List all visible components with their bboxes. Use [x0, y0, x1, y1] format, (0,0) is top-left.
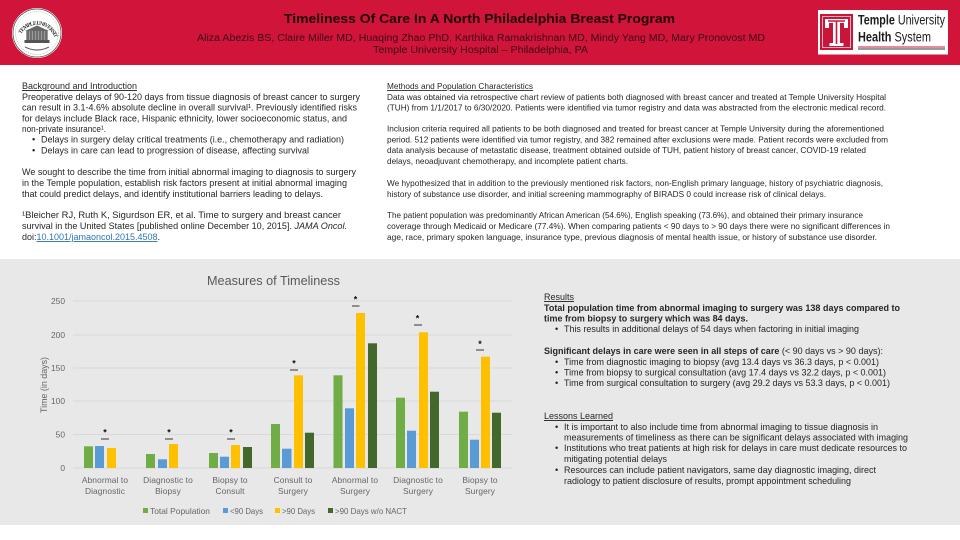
y axis labels: 150 — [51, 363, 65, 373]
x axis category labels: Abnormal to — [332, 475, 378, 485]
bars: Biopsy to Surgery — [459, 357, 501, 468]
x axis category labels — [82, 475, 498, 496]
text block: background and introduction: survival in the United States [published online December 10, 2015]. JAMA Oncol. — [22, 221, 347, 231]
bars: Consult to Surgery — [271, 375, 314, 468]
panel: lower gray section — [0, 259, 960, 525]
text block: results: Time from biopsy to surgical consultation (avg 17.4 days vs 32.2 days, p < 0.001) — [564, 368, 886, 378]
text block: lessons learned: radiology to patient disclosure of results, prompt appointment scheduling — [564, 476, 851, 486]
bars: Biopsy to Consult — [209, 445, 252, 468]
text block: background and introduction: for delays include Black race, Hispanic ethnicity, lower socioeconomic status, and — [22, 113, 347, 123]
text block: background and introduction: in the Temple population, establish risk factors present at initial abnormal imaging — [22, 178, 347, 188]
significance markers: * — [292, 358, 296, 368]
x axis category labels: Biopsy to — [462, 475, 498, 485]
icon: Temple University Health System logo: Health System — [858, 30, 931, 44]
text block: methods and population characteristics: coverage through Medicaid or Medicare (77.4%). When comparing patients < 90 days to > 90 days there were no significant differences in — [387, 221, 890, 231]
x axis category labels: Surgery — [403, 486, 434, 496]
text block: methods and population characteristics: Methods and Population Characteristics — [387, 81, 533, 91]
text block: lessons learned — [544, 411, 908, 486]
y axis title: Time (in days) — [39, 357, 49, 413]
text block: methods and population characteristics: The patient population was predominantly African American (54.6%), English speaking (73.6%), and obtained their primary insurance — [387, 210, 863, 220]
bars: Diagnostic to Surgery — [396, 332, 439, 468]
x axis category labels: Surgery — [278, 486, 309, 496]
text block: background and introduction: non-private insurance¹. — [22, 124, 106, 134]
chart legend: >90 Days w/o NACT — [335, 506, 407, 516]
text block: methods and population characteristics: delays, neoadjuvant chemotherapy, and incomplete patient charts. — [387, 156, 628, 166]
significance markers: * — [478, 339, 482, 349]
text block: background and introduction: Delays in care can lead to progression of disease, affecting survival — [41, 145, 309, 155]
panel: header banner — [0, 0, 960, 65]
authors: Aliza Abezis BS, Claire Miller MD, Huaqing Zhao PhD, Karthika Ramakrishnan MD, Mindy Yang MD, Mary Pronovost MD — [197, 33, 765, 44]
text block: lessons learned: • — [555, 443, 558, 453]
y axis labels: 100 — [51, 396, 65, 406]
text block: results: Results — [544, 292, 574, 302]
x axis category labels: Diagnostic to — [393, 475, 443, 485]
y axis labels: 250 — [51, 296, 65, 306]
text block: background and introduction: Delays in surgery delay critical treatments (i.e., chemotherapy and radiation) — [41, 135, 344, 145]
x axis category labels: Diagnostic — [85, 486, 125, 496]
text block: methods and population characteristics: Inclusion criteria required all patients to be both diagnosed and treated for breast cancer at Temple University during the aforementioned — [387, 124, 884, 134]
y axis labels: 200 — [51, 330, 65, 340]
text block: results: Time from diagnostic imaging to biopsy (avg 13.4 days vs 36.3 days, p < 0.001) — [564, 357, 879, 367]
text block: results: • — [555, 324, 558, 334]
x axis category labels: Surgery — [340, 486, 371, 496]
text block: lessons learned: Lessons Learned — [544, 411, 613, 421]
text block: background and introduction: Background and Introduction — [22, 81, 137, 91]
text block: methods and population characteristics: age, race, primary spoken language, insurance type, previous diagnosis of mental health issue, or history of substance use disorder. — [387, 232, 877, 242]
significance markers: * — [103, 428, 107, 438]
y axis labels — [51, 296, 65, 473]
text block: background and introduction: • — [32, 145, 35, 155]
text block: background and introduction: • — [32, 135, 35, 145]
y axis labels: 0 — [60, 463, 65, 473]
text block: results: This results in additional delays of 54 days when factoring in initial imaging — [564, 324, 859, 334]
text block: lessons learned: • — [555, 422, 558, 432]
text block: methods and population characteristics: (TUH) from 1/1/2017 to 6/30/2020. Patients were identified via tumor registry and data was abstracted from the electronic medical record. — [387, 103, 886, 113]
bars: Abnormal to Surgery — [334, 313, 377, 468]
chart legend: >90 Days — [282, 506, 315, 516]
text block: lessons learned: It is important to also include time from abnormal imaging to tissue diagnosis in — [564, 422, 878, 432]
x axis category labels: Surgery — [465, 486, 496, 496]
chart legend — [143, 506, 407, 516]
icon: Temple University Health System logo: Temple University — [858, 12, 945, 28]
text block: methods and population characteristics: data analysis because of metastatic disease, treatment obtained outside of TUH, patient history of breast cancer, COVID-19 related — [387, 145, 866, 155]
chart legend: <90 Days — [230, 506, 263, 516]
x axis category labels: Diagnostic to — [143, 475, 193, 485]
x axis category labels: Consult — [215, 486, 245, 496]
text block: background and introduction: doi:10.1001/jamaoncol.2015.4508. — [22, 232, 160, 242]
affiliation: Temple University Hospital – Philadelphia, PA — [373, 45, 588, 56]
icon: Temple University Health System logo — [818, 10, 948, 54]
text block: lessons learned: mitigating potential delays — [564, 454, 667, 464]
chart: Measures of Timeliness bar chart — [39, 273, 512, 516]
text block: results: Time from surgical consultation to surgery (avg 29.2 days vs 53.3 days, p < 0.001) — [564, 378, 890, 388]
text block: lessons learned: Institutions who treat patients at high risk for delays in care must dedicate resources to — [564, 443, 907, 453]
significance markers: * — [416, 314, 420, 324]
text block: results — [544, 292, 900, 388]
text block: methods and population characteristics: history of substance use disorder, and initial screening mammography of BIRADS 0 could increase risk of clinical delays. — [387, 189, 826, 199]
text block: background and introduction — [22, 81, 360, 242]
text block: results: Total population time from abnormal imaging to surgery was 138 days compared to — [544, 303, 900, 313]
chart legend: Total Population — [150, 506, 210, 516]
text block: lessons learned: measurements of timeliness as there can be significant delays associated with imaging — [564, 432, 908, 442]
x axis category labels: Biopsy to — [212, 475, 248, 485]
text block: background and introduction: ¹Bleicher RJ, Ruth K, Sigurdson ER, et al. Time to surgery and breast cancer — [22, 210, 341, 220]
text block: results: • — [555, 378, 558, 388]
text block: background and introduction: can result in 3.1-4.6% absolute decline in overall survival¹. Previously identified risks — [22, 103, 357, 113]
significance markers: * — [167, 428, 171, 438]
x axis category labels: Consult to — [274, 475, 313, 485]
significance markers: * — [229, 428, 233, 438]
y axis labels: 50 — [56, 430, 65, 440]
text block: background and introduction: that could predict delays, and identify institutional barriers leading to delays. — [22, 189, 323, 199]
text block: results: • — [555, 368, 558, 378]
bars: Abnormal to Diagnostic — [84, 446, 116, 468]
text block: lessons learned: • — [555, 465, 558, 475]
significance markers — [101, 294, 484, 439]
text block: results: Significant delays in care were seen in all steps of care (< 90 days vs > 90 days): — [544, 346, 883, 356]
text block: methods and population characteristics: period. 512 patients were identified via tumor registry, and 382 remained after exclusions were made. Patient records were excluded from — [387, 134, 888, 144]
x axis category labels: Abnormal to — [82, 475, 128, 485]
text block: background and introduction: We sought to describe the time from initial abnormal imaging to diagnosis to surgery — [22, 167, 356, 177]
text block: background and introduction: Preoperative delays of 90-120 days from tissue diagnosis of breast cancer to surgery — [22, 92, 360, 102]
text block: methods and population characteristics — [387, 81, 890, 242]
text block: results: time from biopsy to surgery which was 84 days. — [544, 314, 748, 324]
bars: Diagnostic to Biopsy — [146, 444, 178, 468]
text block: lessons learned: Resources can include patient navigators, same day diagnostic imaging, direct — [564, 465, 876, 475]
icon: Temple University seal — [12, 8, 62, 58]
significance markers: * — [354, 294, 358, 304]
title: Timeliness Of Care In A North Philadelphia Breast Program — [284, 11, 675, 26]
chart title: Measures of Timeliness — [207, 273, 340, 288]
text block: methods and population characteristics: We hypothesized that in addition to the previously mentioned risk factors, non-English primary language, history of psychiatric diagnosis, — [387, 178, 883, 188]
x axis category labels: Biopsy — [155, 486, 182, 496]
text block: results: • — [555, 357, 558, 367]
text block: methods and population characteristics: Data was obtained via retrospective chart review of patients both diagnosed with breast cancer and treated at Temple University Hospital — [387, 92, 886, 102]
